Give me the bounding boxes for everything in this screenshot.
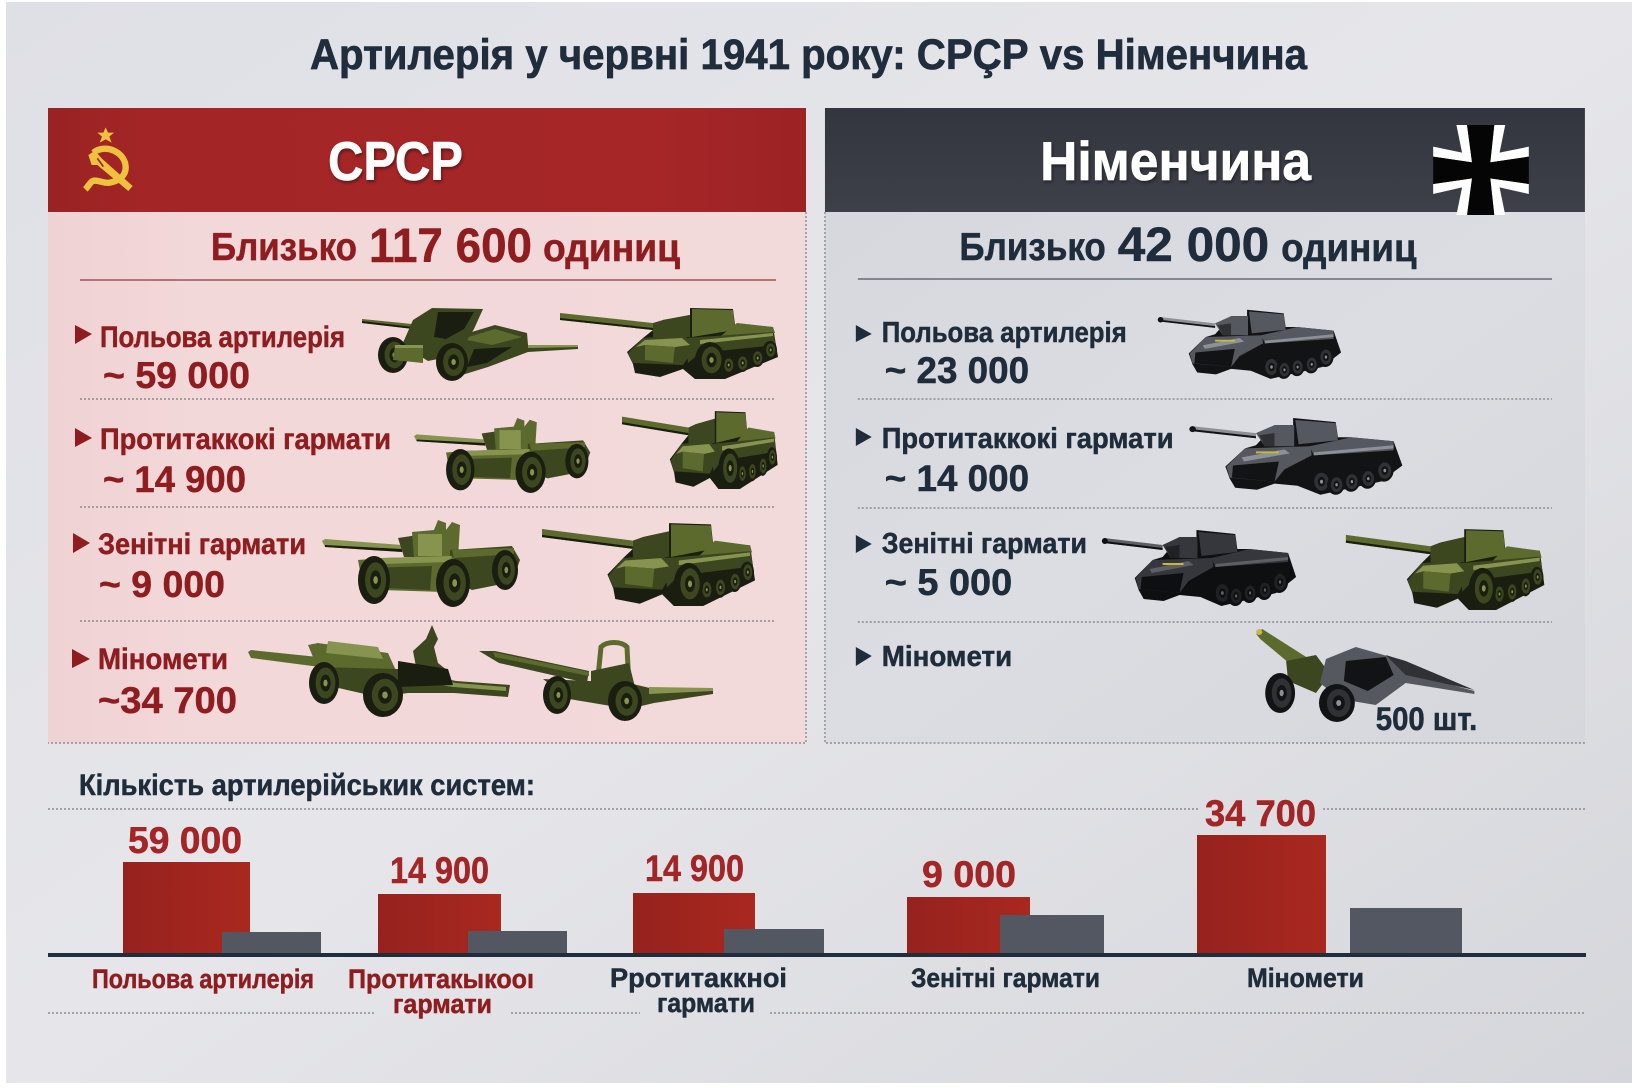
USSR row: field artillery: ~ 59 000 [103, 355, 250, 396]
bars: mortars [1197, 793, 1462, 993]
Germany row: anti-tank guns: ~ 14 000 [885, 458, 1029, 499]
Germany header band [825, 108, 1585, 215]
chart heading: Кількість артилерійськик систем: [79, 769, 535, 802]
Germany total: 42 000 [1118, 219, 1269, 272]
Germany row: mortars [856, 629, 1477, 737]
Germany header label: Німенчина [1040, 130, 1311, 192]
bars: anti-aircraft guns: Зенітні гармати [911, 963, 1100, 993]
USSR row: mortars: Міномети [98, 643, 228, 676]
USSR row: field artillery: Польова артилерія [100, 321, 345, 354]
bars: mortars: Міномети [1247, 963, 1364, 993]
title: Артилерія у червні 1941 року: СРÇР vs Німенчина [310, 31, 1308, 79]
USSR row: anti-tank guns: Протитаккокі гармати [100, 423, 391, 456]
Germany row: anti-aircraft guns [856, 528, 1544, 610]
bars: anti-tank guns 2: Рротитаккноі [610, 963, 787, 993]
bars: anti-tank guns 1 [348, 850, 567, 1019]
Germany row: anti-aircraft guns: Зенітні гармати [882, 528, 1087, 560]
USSR total: Близько [211, 226, 357, 269]
bars: field artillery: Польова артилерія [92, 964, 314, 994]
Germany row: mortars: 500 шт. [1376, 701, 1477, 737]
USSR header band [48, 108, 806, 212]
Germany total: Близько [959, 226, 1106, 269]
USSR total: одиниц [543, 227, 680, 270]
Germany row: anti-aircraft guns: ~ 5 000 [885, 562, 1012, 603]
USSR header label: СРСР [328, 130, 463, 192]
bar chart [48, 793, 1586, 1019]
bars: anti-tank guns 1: Протитакыкоoı [348, 964, 534, 994]
icon: hammer and sickle [85, 127, 133, 191]
bars: field artillery: 59 000 [128, 820, 242, 861]
bars: anti-tank guns 2: гармати [657, 988, 755, 1018]
USSR row: anti-aircraft guns: ~ 9 000 [99, 564, 225, 605]
Germany row: field artillery [856, 310, 1341, 391]
USSR total [211, 220, 680, 273]
panel: USSR [48, 108, 806, 743]
panel: Germany [825, 108, 1585, 743]
Germany row: anti-tank guns: Протитаккокі гармати [882, 423, 1174, 455]
chart axis [48, 953, 1586, 957]
USSR row: mortars [72, 625, 713, 721]
bars: anti-tank guns 1: гармати [393, 989, 492, 1019]
Germany row: field artillery: ~ 23 000 [885, 350, 1029, 391]
USSR row: anti-aircraft guns: Зенітні гармати [98, 528, 306, 561]
USSR row: anti-tank guns [75, 411, 778, 500]
USSR row: field artillery [75, 308, 778, 396]
bars: mortars: 34 700 [1205, 793, 1316, 834]
Germany row: mortars: Міномети [882, 641, 1012, 673]
icon: balkenkreuz [1433, 125, 1529, 215]
Germany total [959, 219, 1417, 272]
Germany row: field artillery: Польова артилерія [882, 317, 1127, 349]
USSR row: anti-tank guns: ~ 14 900 [103, 459, 246, 500]
bars: field artillery [92, 820, 321, 994]
Germany row: anti-tank guns [856, 418, 1402, 499]
bars: anti-tank guns 2 [610, 848, 824, 1018]
USSR total: 117 600 [369, 220, 532, 273]
Germany total: одиниц [1281, 227, 1417, 270]
USSR row: mortars: ~34 700 [98, 680, 237, 721]
bars: anti-tank guns 1: 14 900 [390, 850, 489, 891]
bars: anti-aircraft guns [907, 854, 1104, 993]
bars: anti-aircraft guns: 9 000 [922, 854, 1016, 895]
USSR row: anti-aircraft guns [73, 520, 755, 607]
bars: anti-tank guns 2: 14 900 [645, 848, 744, 889]
